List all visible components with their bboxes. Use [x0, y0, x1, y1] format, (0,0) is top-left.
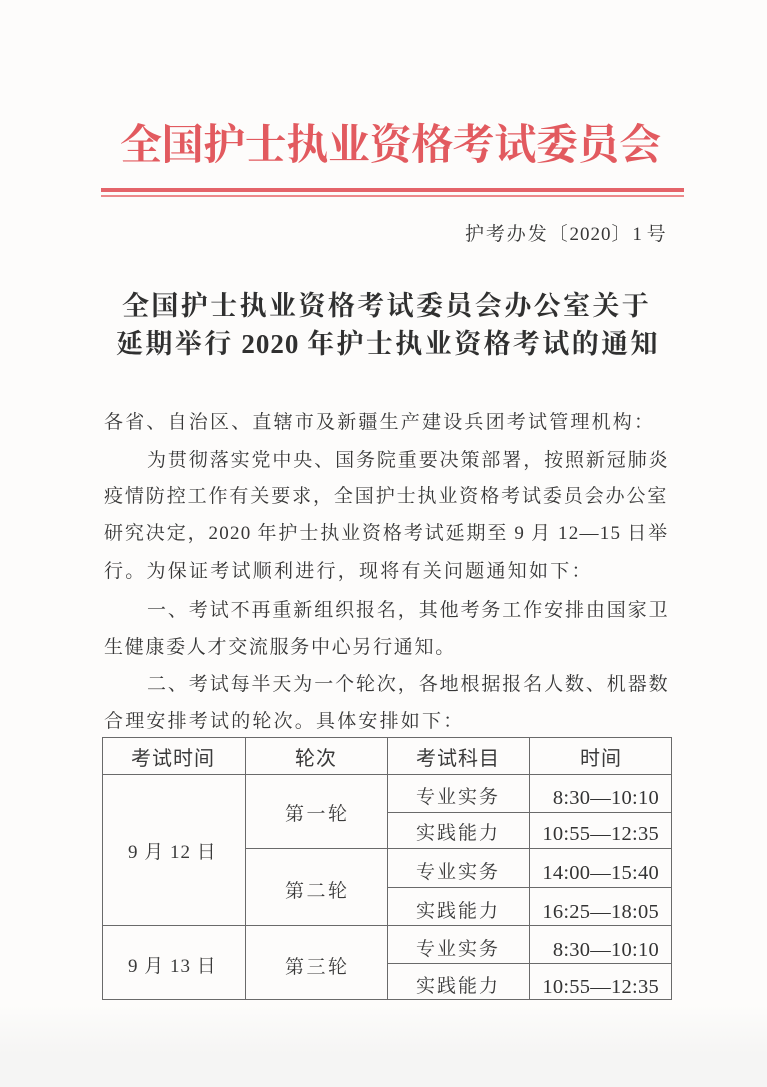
exam schedule table: 专业实务: [416, 939, 500, 960]
exam schedule table: 第二轮: [285, 881, 350, 902]
body text: 合理安排考试的轮次。具体安排如下：: [104, 711, 464, 732]
exam schedule table: 8:30—10:10: [553, 787, 659, 809]
exam schedule table: 14:00—15:40: [542, 862, 659, 884]
body text: [104, 412, 670, 732]
body text: 疫情防控工作有关要求，全国护士执业资格考试委员会办公室: [104, 486, 668, 507]
notice heading: 全国护士执业资格考试委员会办公室关于: [122, 291, 651, 321]
exam schedule table: 实践能力: [416, 823, 500, 844]
body text: 一、考试不再重新组织报名，其他考务工作安排由国家卫: [147, 600, 670, 621]
notice heading: 延期举行 2020 年护士执业资格考试的通知: [116, 329, 660, 359]
exam schedule table: 实践能力: [416, 901, 500, 922]
exam schedule table: 10:55—12:35: [542, 976, 659, 998]
exam schedule table: 第一轮: [285, 804, 350, 825]
body text: 各省、自治区、直辖市及新疆生产建设兵团考试管理机构：: [104, 412, 655, 433]
exam schedule table: [102, 737, 672, 1000]
red double rule: [101, 188, 684, 197]
exam schedule table: 第三轮: [285, 957, 350, 978]
exam schedule table: 9 月 13 日: [128, 956, 217, 977]
document number: 护考办发〔2020〕1 号: [465, 224, 668, 245]
body text: 行。为保证考试顺利进行，现将有关问题通知如下：: [104, 561, 593, 582]
exam schedule table: 实践能力: [416, 976, 500, 997]
exam schedule table: 9 月 12 日: [128, 842, 217, 863]
exam schedule table: 专业实务: [416, 787, 500, 808]
exam schedule table: 考试科目: [416, 742, 500, 771]
body text: 二、考试每半天为一个轮次，各地根据报名人数、机器数: [147, 674, 670, 695]
notice heading: [116, 291, 660, 359]
letterhead title: 全国护士执业资格考试委员会: [120, 123, 661, 169]
exam schedule table: 轮次: [295, 742, 337, 771]
exam schedule table: 时间: [580, 742, 622, 771]
scanned paper shading at page bottom: [0, 1005, 767, 1087]
exam schedule table: 专业实务: [416, 862, 500, 883]
exam schedule table: 16:25—18:05: [542, 901, 659, 923]
exam schedule table: 考试时间: [131, 742, 215, 771]
body text: 为贯彻落实党中央、国务院重要决策部署，按照新冠肺炎: [147, 450, 670, 471]
exam schedule table: 10:55—12:35: [542, 823, 659, 845]
exam schedule table: 8:30—10:10: [553, 939, 659, 961]
body text: 研究决定，2020 年护士执业资格考试延期至 9 月 12—15 日举: [104, 523, 669, 544]
body text: 生健康委人才交流服务中心另行通知。: [104, 637, 456, 658]
